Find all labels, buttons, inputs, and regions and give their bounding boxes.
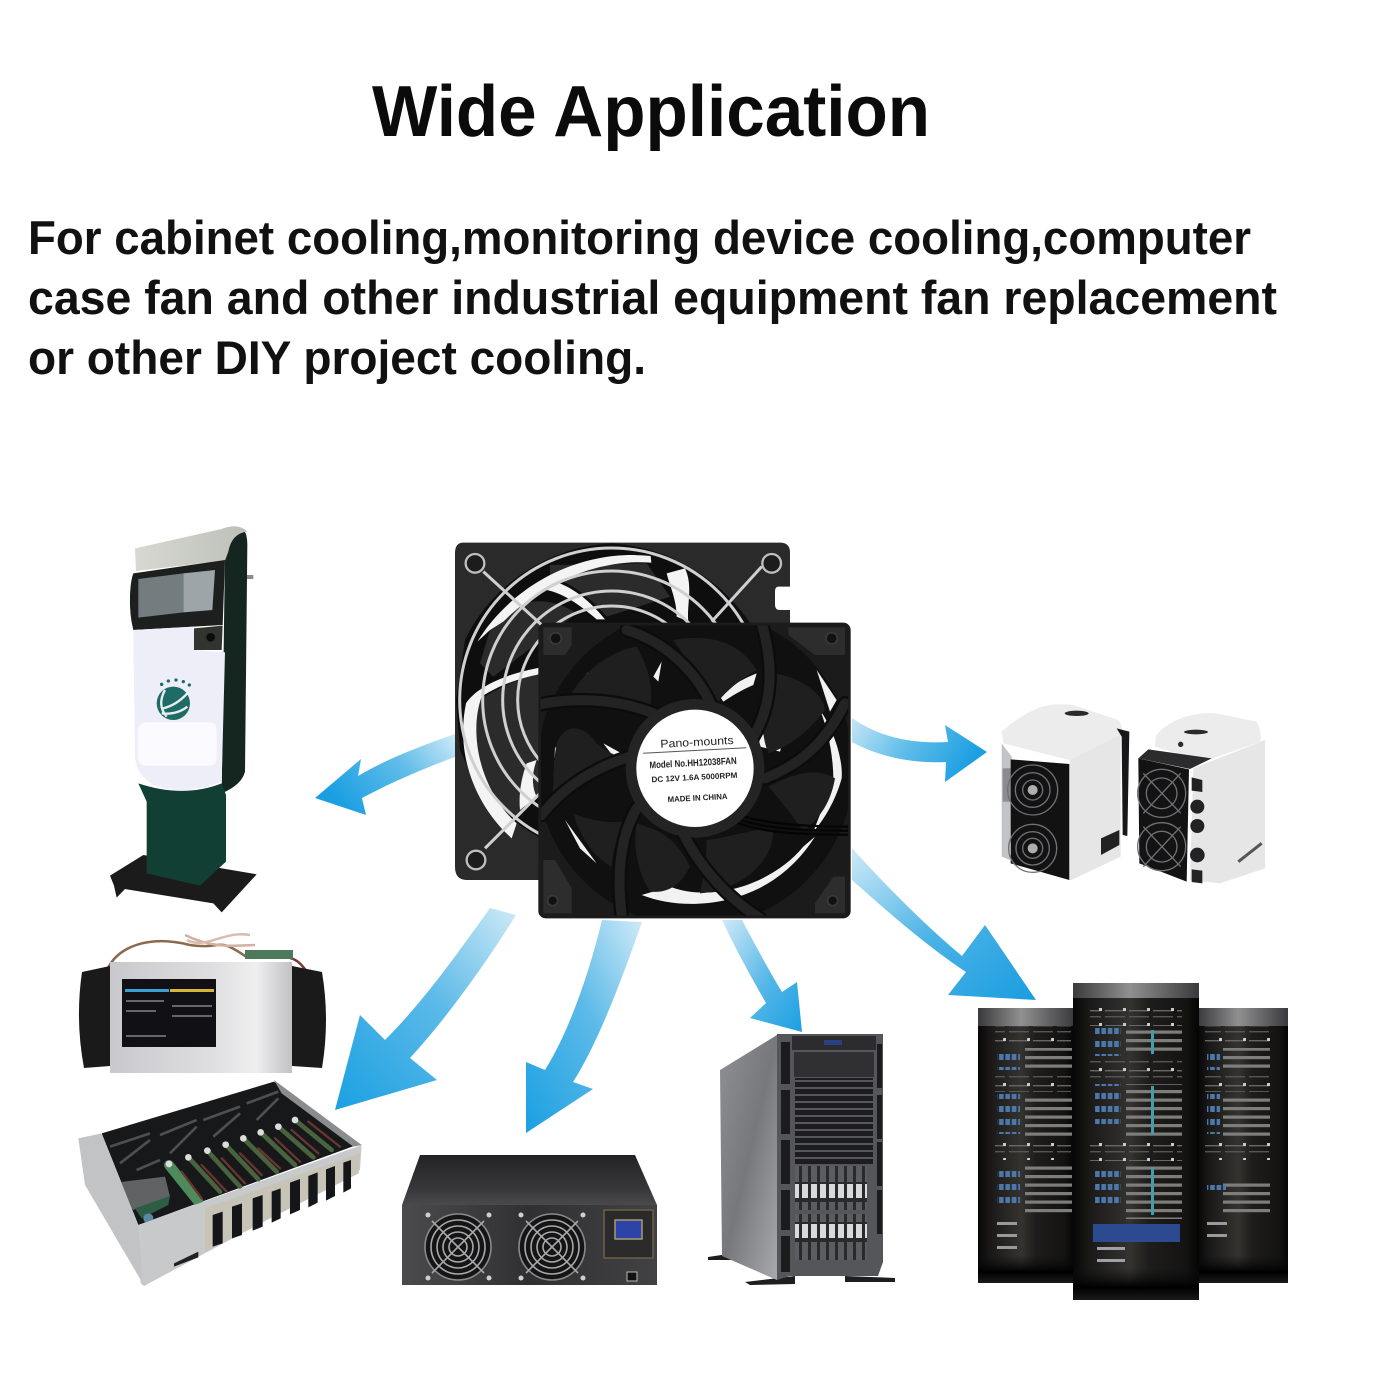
body text: case fan and other industrial equipment fan replacement — [28, 271, 1277, 324]
kiosk cap — [135, 526, 247, 571]
PSU fan left — [425, 1214, 491, 1280]
tower optical bay — [794, 1052, 874, 1077]
miner silver box — [110, 962, 292, 1073]
body text: For cabinet cooling,monitoring device cooling,computer — [28, 211, 1251, 264]
miner B logo — [1238, 843, 1262, 862]
tower drive bays — [795, 1166, 867, 1260]
left rack — [978, 1008, 1074, 1283]
rig slot plate — [205, 1153, 360, 1252]
miner B side — [1190, 740, 1265, 883]
tower front vents — [781, 1042, 882, 1272]
miner control board — [245, 950, 293, 959]
server racks — [978, 983, 1288, 1300]
back fan with wire guard — [455, 543, 790, 880]
rig PCIe slots — [213, 1160, 351, 1247]
kiosk camera slot — [194, 626, 223, 650]
arrow: to ASIC miners — [852, 718, 987, 782]
kiosk white body — [133, 627, 225, 790]
PSU enclosure with two fans — [402, 1155, 657, 1285]
white gaps — [553, 662, 842, 904]
rig label — [174, 1252, 198, 1267]
PSU fan right — [519, 1214, 585, 1280]
kiosk screen glass — [138, 570, 215, 618]
label text: Model No.HH12038FAN — [649, 756, 737, 771]
miner screen — [122, 979, 216, 1047]
kiosk hook — [243, 575, 253, 579]
label text — [642, 734, 749, 805]
PSU fan screws — [426, 1212, 586, 1280]
rack teal LEDs — [1151, 1030, 1154, 1215]
miner wires — [105, 934, 312, 978]
rig card connectors — [166, 1117, 298, 1167]
tower top panel — [792, 1036, 876, 1050]
kiosk screen frame — [130, 560, 225, 630]
label text: DC 12V 1.6A 5000RPM — [651, 771, 738, 784]
miner B control dots — [1178, 742, 1183, 747]
miner A vent — [1002, 743, 1012, 860]
miner A connector — [1101, 830, 1119, 855]
rig power supply bay — [110, 1177, 170, 1223]
struts — [542, 623, 845, 918]
front fan frame — [538, 623, 851, 918]
hub label — [636, 710, 754, 827]
miner A — [1002, 704, 1129, 881]
kiosk base — [110, 855, 257, 912]
strut highlights — [542, 623, 845, 918]
title: Wide Application — [372, 72, 930, 152]
PSU display panel — [604, 1210, 653, 1258]
kiosk logo — [157, 678, 191, 720]
fan wires — [733, 813, 848, 835]
miner left fan — [79, 966, 110, 1068]
miner right fan — [292, 966, 326, 1068]
miner A side — [1070, 735, 1121, 881]
tower front frame — [777, 1034, 883, 1280]
arrow: to kiosk — [315, 734, 455, 815]
label text: Pano-mounts — [660, 735, 734, 751]
back fan frame — [455, 543, 790, 880]
kiosk — [110, 526, 257, 912]
hub bezel — [626, 699, 764, 838]
rig cards — [169, 1120, 340, 1202]
rig rear fans — [110, 1092, 278, 1170]
body text — [28, 211, 1277, 384]
kiosk side panel — [222, 528, 247, 793]
arrow: to tower server — [722, 920, 802, 1032]
arrow: to mining rig — [335, 908, 516, 1110]
label text: MADE IN CHINA — [667, 792, 728, 804]
arrow: to PSU — [526, 920, 642, 1133]
guard screws — [466, 554, 781, 869]
kiosk pedestal — [138, 783, 226, 886]
rig back wall — [274, 1080, 362, 1147]
PSU port — [627, 1272, 637, 1281]
front fan corner plates — [543, 627, 845, 913]
miner A top handle — [1065, 711, 1089, 716]
rig front wall — [138, 1145, 362, 1286]
miner A side slot — [1117, 728, 1129, 836]
PSU front — [402, 1205, 657, 1285]
back fan opening — [456, 543, 770, 858]
ASIC miner with side fans — [79, 934, 326, 1073]
tower server — [708, 1034, 895, 1285]
center rack — [1073, 983, 1199, 1300]
miner B top handle — [1184, 730, 1208, 734]
label disc — [636, 710, 754, 827]
miner A top cap — [1002, 704, 1122, 761]
mining rig open chassis — [78, 1080, 362, 1286]
PSU top — [402, 1155, 657, 1205]
miner B — [1138, 713, 1265, 883]
body text: or other DIY project cooling. — [28, 331, 646, 384]
PSU display screen — [615, 1220, 642, 1239]
miner B top vent — [1138, 749, 1212, 769]
rack blue display — [1093, 1224, 1180, 1242]
rig left wall — [78, 1133, 143, 1283]
arrow: to server racks — [852, 848, 1036, 1000]
miner B fan face — [1138, 758, 1189, 882]
wire guard — [460, 548, 764, 852]
front fan — [537, 610, 853, 927]
right rack — [1198, 1008, 1288, 1283]
miner B ports — [1190, 777, 1205, 883]
tower side panel — [720, 1035, 777, 1280]
ASIC miners pair — [1002, 704, 1265, 883]
back fan white gaps — [463, 555, 689, 838]
front fan screw holes — [548, 633, 838, 906]
tower upper bays — [795, 1078, 873, 1164]
miner A fan face — [1011, 759, 1069, 880]
kiosk body light panel — [138, 722, 217, 766]
back fan blades — [470, 563, 670, 820]
tower feet — [708, 1253, 895, 1285]
miner B top cap — [1155, 713, 1261, 762]
front fan rotor area — [541, 626, 848, 916]
rig interior — [102, 1082, 357, 1225]
blades — [553, 638, 835, 893]
